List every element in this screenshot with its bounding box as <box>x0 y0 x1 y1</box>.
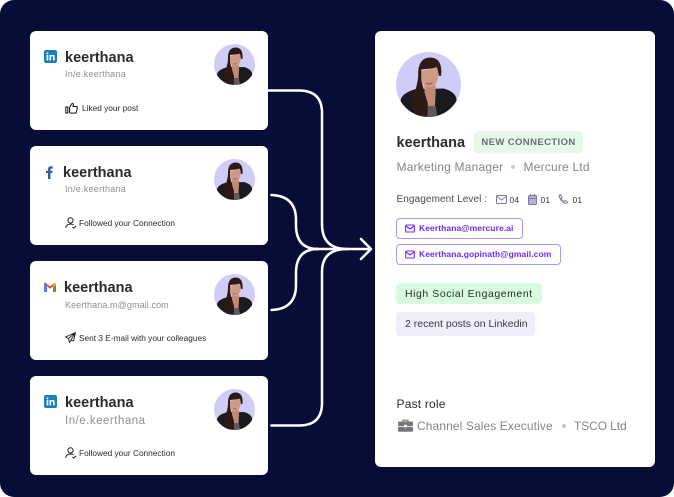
name: keerthana <box>65 394 134 410</box>
avatar: large portrait <box>396 52 461 117</box>
tag: recent posts <box>396 312 535 336</box>
icon: thumbs up <box>65 102 78 114</box>
panel: Gmail sent mail card <box>30 261 268 360</box>
activity text: Followed your Connection <box>79 448 175 458</box>
icon: follow user <box>65 447 76 459</box>
past role heading: Past role <box>396 397 446 411</box>
panel: LinkedIn liked post card <box>30 31 268 130</box>
name: keerthana <box>63 164 132 180</box>
tag: recent posts: 2 recent posts on Linkedin <box>405 318 528 330</box>
handle: In/e.keerthana <box>65 68 126 78</box>
badge: new connection: NEW CONNECTION <box>481 137 576 148</box>
panel: profile details <box>375 31 655 467</box>
name: keerthana <box>396 134 465 150</box>
email chip: mercure <box>396 218 523 239</box>
icon: envelope <box>496 195 507 204</box>
job title and company <box>396 160 590 174</box>
tag: high social engagement <box>396 283 542 304</box>
handle: In/e.keerthana <box>65 184 126 194</box>
icon: phone <box>558 194 568 204</box>
activity text: Liked your post <box>82 102 138 112</box>
icon: LinkedIn <box>44 50 57 63</box>
icon: Gmail <box>44 282 56 292</box>
icon: follow user <box>65 217 76 229</box>
name: keerthana <box>64 280 133 296</box>
icon: briefcase <box>398 420 413 432</box>
icon: paper plane <box>65 332 76 343</box>
avatar <box>214 389 255 430</box>
name: keerthana <box>65 50 134 66</box>
email chip: gmail <box>396 244 561 265</box>
past role details <box>398 419 627 433</box>
icon: mail <box>405 224 415 232</box>
email chip: mercure: Keerthana@mercure.ai <box>419 223 513 233</box>
email handle: Keerthana.m@gmail.com <box>65 300 169 310</box>
job title and company: Mercure Ltd <box>524 160 590 174</box>
icon: LinkedIn <box>44 395 57 408</box>
icon: calendar <box>528 194 537 205</box>
engagement level row: 01 <box>540 194 550 204</box>
past role details: Channel Sales Executive <box>417 419 553 433</box>
avatar <box>214 44 255 85</box>
icon: mail <box>405 250 415 258</box>
engagement level row: 04 <box>510 194 519 204</box>
panel: LinkedIn followed card <box>30 376 268 475</box>
avatar <box>214 274 255 315</box>
past role details: TSCO Ltd <box>574 419 627 433</box>
handle: In/e.keerthana <box>65 415 146 427</box>
engagement level row <box>396 194 582 205</box>
icon: Facebook <box>46 166 53 179</box>
badge: new connection <box>474 131 583 153</box>
activity text: Sent 3 E-mail with your colleagues <box>79 332 206 342</box>
panel: Facebook followed card <box>30 146 268 245</box>
activity text: Followed your Connection <box>79 218 175 228</box>
tag: high social engagement: High Social Engagement <box>405 288 533 300</box>
job title and company: Marketing Manager <box>396 160 503 174</box>
engagement level row: Engagement Level : <box>396 194 487 204</box>
email chip: gmail: Keerthana.gopinath@gmail.com <box>419 249 551 259</box>
avatar <box>214 159 255 200</box>
engagement level row: 01 <box>572 194 582 204</box>
